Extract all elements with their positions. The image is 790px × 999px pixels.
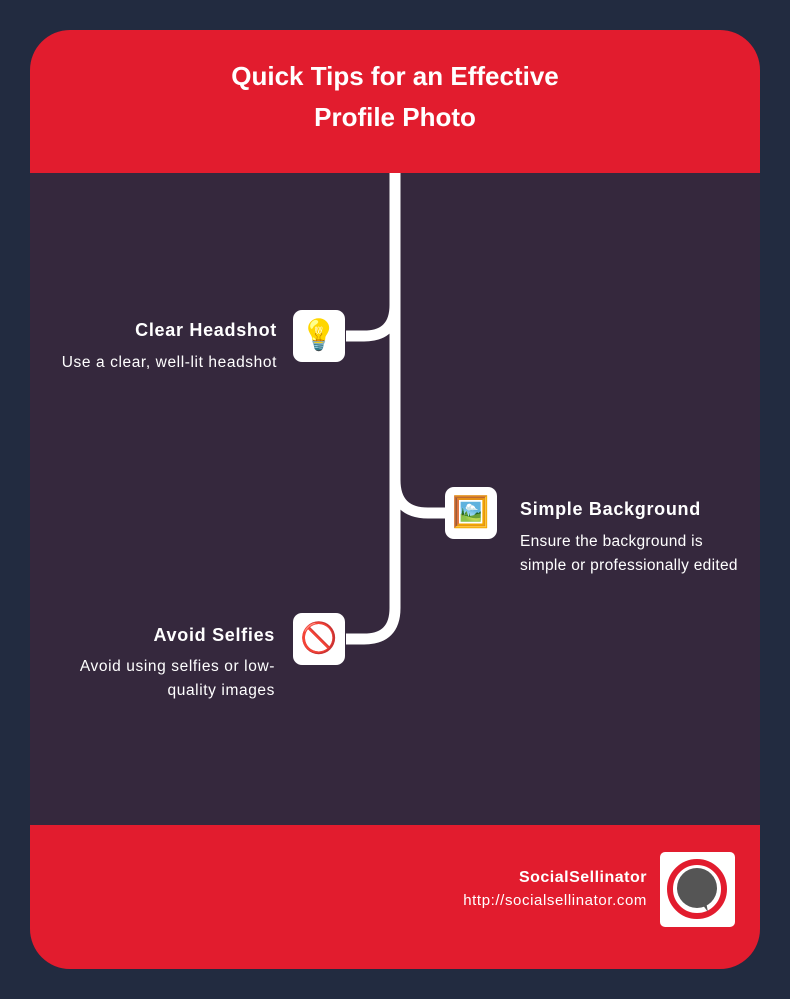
- icon: framed picture: [445, 487, 497, 539]
- text: Avoid using selfies or low-: [80, 658, 275, 675]
- icon: framed picture: 🖼️: [452, 495, 490, 530]
- title: Quick Tips for an Effective: [231, 61, 559, 91]
- footer url: http://socialsellinator.com: [463, 892, 647, 909]
- item: Simple Background: [445, 487, 738, 574]
- footer: [30, 825, 760, 969]
- item: Clear Headshot: [62, 310, 345, 371]
- text: [520, 533, 738, 574]
- footer brand name: SocialSellinator: [519, 869, 647, 886]
- heading: Avoid Selfies: [154, 625, 275, 645]
- icon: logo: [660, 852, 735, 927]
- item: Avoid Selfies: [80, 613, 345, 699]
- text: [80, 658, 275, 699]
- title: [30, 30, 760, 173]
- text: quality images: [168, 682, 275, 699]
- text: simple or professionally edited: [520, 557, 738, 574]
- heading: Clear Headshot: [135, 320, 277, 340]
- text: Ensure the background is: [520, 533, 703, 550]
- icon: light bulb: [293, 310, 345, 362]
- icon: light bulb: 💡: [300, 318, 338, 353]
- icon: prohibited: 🚫: [300, 621, 338, 656]
- text: Use a clear, well-lit headshot: [62, 354, 277, 371]
- title: Profile Photo: [314, 102, 476, 132]
- heading: Simple Background: [520, 499, 701, 519]
- icon: prohibited: [293, 613, 345, 665]
